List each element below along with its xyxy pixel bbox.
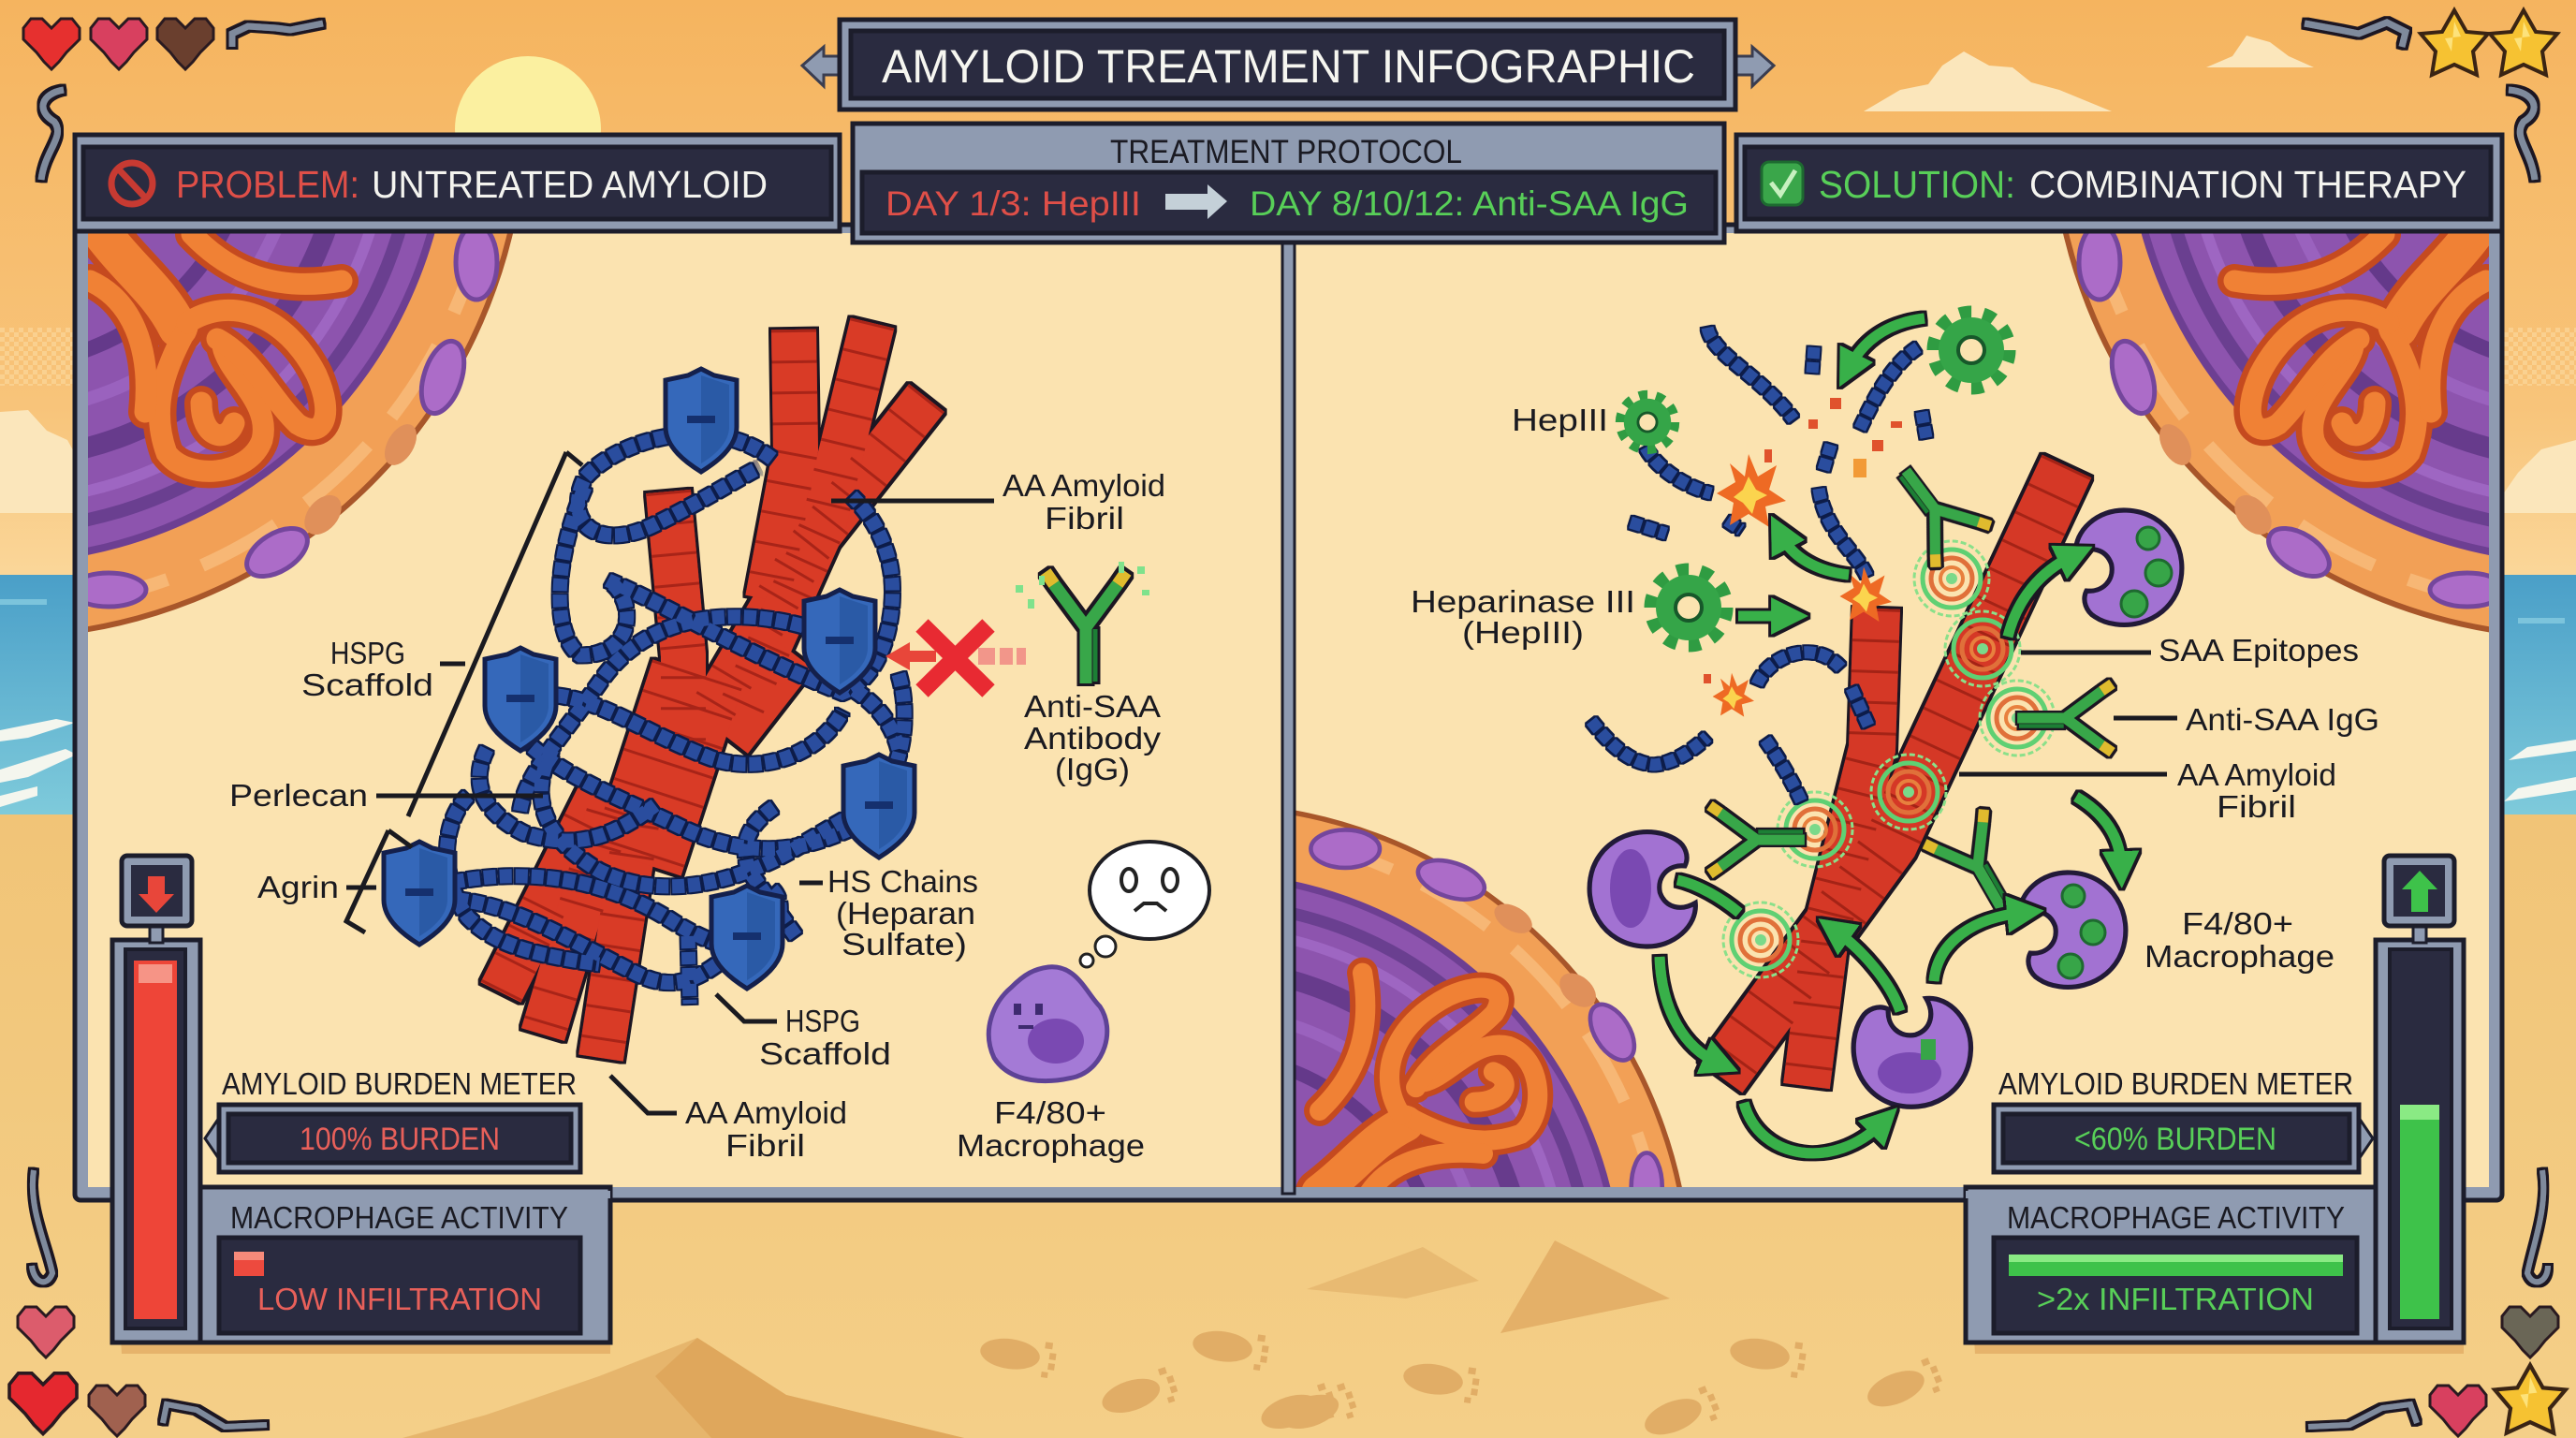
title text: AMYLOID TREATMENT INFOGRAPHIC [882, 40, 1695, 93]
problem heading: UNTREATED AMYLOID [372, 163, 768, 206]
label: Heparinase III: (HepIII) [1462, 615, 1584, 650]
day 8/10/12 text: DAY 8/10/12: Anti-SAA IgG [1250, 184, 1689, 223]
problem heading: PROBLEM: [176, 163, 359, 206]
icon: sad macrophage [988, 967, 1107, 1081]
enzyme gears [1620, 313, 2009, 645]
background: sky [0, 0, 2576, 580]
antibodies bound [1710, 450, 2112, 926]
fibrils, cleared [1720, 466, 2067, 1086]
HSPG shields [384, 369, 915, 989]
leader lines, left [346, 452, 994, 1113]
label: Anti-SAA Antibody: (IgG) [1055, 752, 1130, 786]
HUD: bottom right decorations [2308, 1170, 2566, 1436]
panel: problem (left) [88, 233, 1281, 1187]
solution heading: COMBINATION THERAPY [2029, 163, 2466, 206]
fibril segment lines [1720, 466, 2067, 1086]
arrow: protocol sequence [1165, 184, 1227, 219]
label: AA Amyloid Fibril, top: Fibril [1045, 501, 1124, 536]
label: AA Amyloid Fibril, lower: AA Amyloid [685, 1095, 847, 1130]
protocol title: TREATMENT PROTOCOL [1110, 134, 1462, 170]
HS chains network [421, 434, 904, 1004]
green pathway arrows [1660, 318, 2121, 1153]
title banner [802, 20, 1774, 110]
amyloid burden meter: right: AMYLOID BURDEN METER [1998, 1066, 2353, 1101]
label: F4/80+ Macrophage, left: Macrophage [957, 1128, 1145, 1163]
icon: up arrow box [2384, 856, 2454, 926]
label: HSPG Scaffold, left: HSPG [330, 636, 405, 670]
HUD: bottom left decorations [9, 1170, 267, 1436]
sand beach [0, 814, 2576, 1438]
SAA epitope targets [1723, 541, 2055, 977]
icon: blocked X with arrow [886, 625, 1026, 691]
label: SAA Epitopes: SAA Epitopes [2159, 633, 2359, 668]
vertical gauge: left, 100% [112, 856, 200, 1343]
day 1/3 text: DAY 1/3: HepIII [886, 184, 1141, 223]
icon: check shield [1762, 162, 1803, 205]
cell, bottom left [1295, 811, 1682, 1187]
label: HSPG Scaffold, lower: Scaffold [759, 1036, 891, 1071]
explosions [1704, 398, 1902, 717]
icon: prohibited [111, 163, 153, 204]
center divider [1282, 225, 1295, 1194]
leader lines, right [1959, 653, 2177, 774]
cell, top right [2063, 234, 2489, 633]
icon: down arrow box [122, 856, 192, 926]
sand dunes [402, 1240, 1670, 1438]
control panel: right [1966, 1187, 2464, 1354]
panel: solution (right) [1295, 233, 2489, 1187]
low infiltration text: LOW INFILTRATION [257, 1282, 542, 1316]
label: Heparinase III: Heparinase III [1411, 584, 1635, 619]
label: Anti-SAA Antibody: Anti-SAA [1024, 689, 1161, 724]
fibril bundle [501, 323, 927, 1058]
gauge connector [150, 922, 163, 943]
label: Agrin: Agrin [257, 870, 339, 904]
gauge connector [2413, 922, 2426, 943]
cell, top left [88, 234, 513, 633]
dither haze band [0, 328, 2576, 386]
high infiltration bar [2009, 1255, 2343, 1276]
label: F4/80+ Macrophage, right: F4/80+ [2182, 906, 2293, 941]
label: HS chains: (Heparan [836, 896, 975, 931]
label: Perlecan: Perlecan [229, 778, 368, 813]
100% burden value: 100% BURDEN [300, 1122, 500, 1157]
label: HepIII: HepIII [1512, 403, 1608, 437]
right panel labels [1411, 403, 2379, 974]
sun [455, 56, 601, 202]
label: HS chains: Sulfate) [842, 927, 967, 961]
amyloid burden meter: left: AMYLOID BURDEN METER [222, 1066, 577, 1101]
solution heading: SOLUTION: [1819, 163, 2015, 206]
header: solution [1736, 135, 2502, 231]
icon: thought bubble [1080, 842, 1209, 967]
HUD: top right stars and squiggles [2305, 10, 2557, 180]
label: AA Amyloid Fibril, lower: Fibril [725, 1128, 805, 1163]
icon: anti-SAA antibody [1016, 562, 1149, 683]
macrophage activity heading: MACROPHAGE ACTIVITY [230, 1200, 568, 1235]
fibril segment lines [501, 323, 927, 1058]
label: F4/80+ Macrophage, right: Macrophage [2144, 939, 2334, 974]
sea [0, 575, 2576, 818]
degraded HS fragments [1591, 328, 1926, 802]
background clouds [0, 36, 2576, 513]
low infiltration bar [234, 1252, 264, 1276]
amyloid burden meter: left [205, 1066, 580, 1172]
footprints in sand [978, 1326, 1945, 1438]
infiltration text: >2x INFILTRATION [2037, 1282, 2314, 1316]
HUD: top left squiggle [41, 23, 323, 180]
label: AA Amyloid Fibril, top: AA Amyloid [1003, 468, 1165, 503]
label: HSPG Scaffold, lower: HSPG [785, 1004, 860, 1038]
HUD: top left hearts [23, 19, 213, 69]
label: Anti-SAA IgG: Anti-SAA IgG [2186, 702, 2379, 737]
macrophages engulfing [1589, 510, 2182, 1107]
macrophage activity heading, right: MACROPHAGE ACTIVITY [2007, 1200, 2345, 1235]
label: HSPG Scaffold, left: Scaffold [301, 668, 433, 702]
left panel labels [229, 452, 1165, 1163]
label: AA Amyloid Fibril, right: AA Amyloid [2177, 757, 2336, 792]
<60% burden value: <60% BURDEN [2074, 1122, 2276, 1157]
label: Anti-SAA Antibody: Antibody [1024, 721, 1162, 756]
label: F4/80+ Macrophage, left: F4/80+ [994, 1095, 1106, 1130]
header: problem [75, 135, 840, 231]
panel: treatment protocol [853, 124, 1724, 242]
amyloid burden meter: right [1994, 1066, 2373, 1172]
vertical gauge: right, under 60% [2376, 856, 2464, 1343]
main frame [75, 225, 2502, 1200]
label: AA Amyloid Fibril, right: Fibril [2217, 789, 2296, 824]
control panel: left [112, 1187, 610, 1354]
label: HS chains: HS Chains [827, 864, 978, 899]
